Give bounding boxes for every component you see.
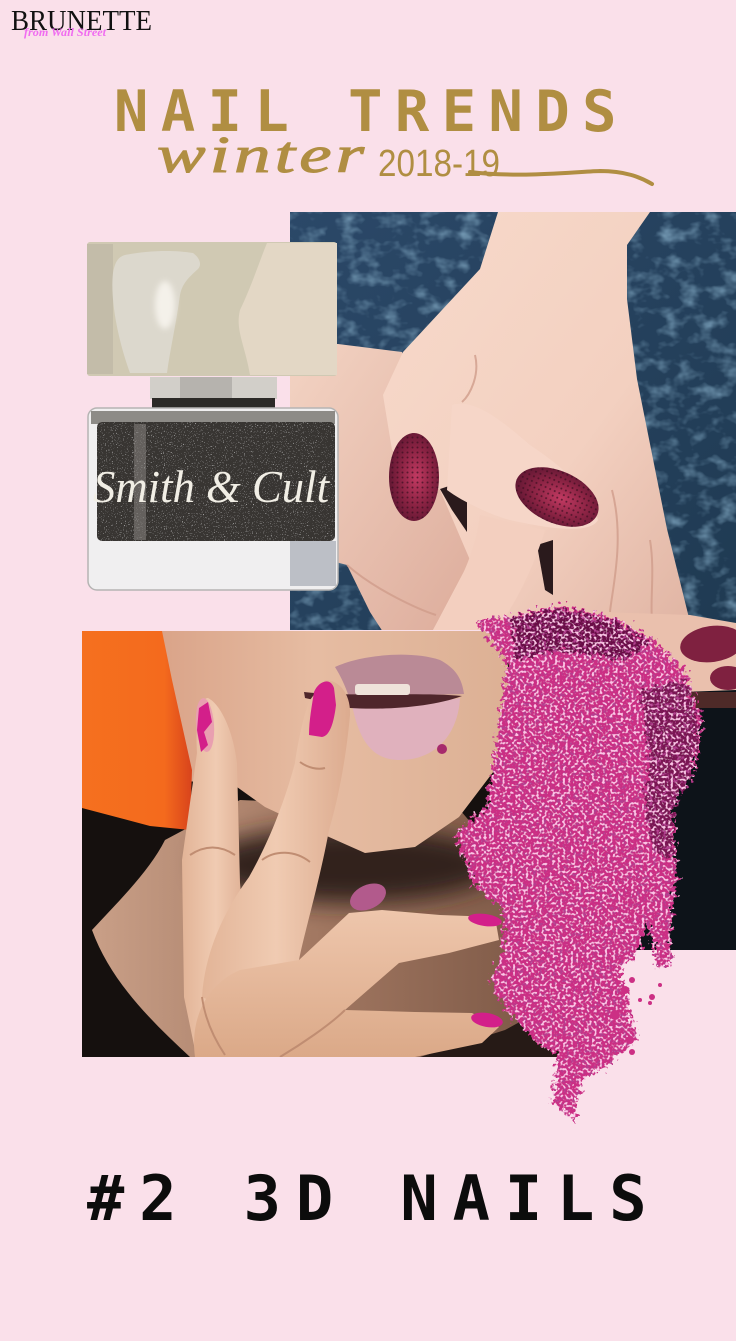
background hand (290, 344, 485, 632)
glass highlight (134, 424, 146, 540)
fur texture (290, 212, 736, 630)
hand with thumb (194, 910, 499, 1057)
logo tagline: from Wall Street (24, 25, 107, 39)
face (150, 631, 515, 853)
cap side band (87, 244, 113, 374)
nail: upper finger (389, 433, 439, 521)
title (114, 79, 652, 185)
heading: nail trends: NAIL TRENDS (114, 79, 629, 145)
maroon nails top right (678, 622, 736, 690)
footer heading: #2 3D NAILS (87, 1162, 662, 1235)
decorative swash underline (470, 171, 652, 184)
bottle cap (87, 242, 337, 376)
subheading: winter: winter (157, 126, 368, 184)
logo wordmark: BRUNETTE (11, 5, 152, 37)
bottle glass (88, 408, 338, 590)
cap right tone (239, 243, 337, 375)
leopard nail: pinky (196, 698, 214, 752)
dark glitter crest on top (510, 608, 650, 660)
subheading year: 2018-19 (378, 143, 500, 185)
bottle brand script: Smith & Cult (93, 461, 330, 512)
dark corner at bottom right (420, 1022, 559, 1057)
neck and chest (92, 800, 560, 1057)
dark glitter along right edge (640, 680, 700, 860)
orange hair (82, 631, 192, 830)
leopard nail: index (309, 681, 336, 737)
leopard nail: lower (471, 1012, 503, 1028)
right dark backdrop (620, 690, 736, 950)
glitter swatch (455, 605, 703, 1120)
cap glint (155, 281, 175, 329)
leopard nail: thumb (468, 914, 502, 926)
ring and index finger (202, 680, 350, 1020)
glitter polish (97, 422, 335, 541)
glitter main body (455, 605, 703, 1120)
lips (304, 655, 464, 760)
scattered glitter crumbs (610, 977, 662, 1055)
bottle neck (150, 377, 277, 408)
finger creases (190, 762, 345, 1057)
overlapping finger (447, 471, 598, 529)
photo: woman with leopard nails (82, 612, 736, 1057)
hand at top right (600, 612, 736, 692)
pinky finger (182, 698, 240, 1046)
nail polish bottle (87, 242, 338, 590)
logo (11, 5, 152, 39)
main hand (383, 212, 690, 630)
bottle glass shoulder (91, 411, 335, 424)
blue fur background (290, 212, 736, 630)
nail: side finger (515, 467, 599, 527)
finger shadows (440, 480, 553, 595)
shadow under chin (200, 827, 500, 903)
photo: hands on blue fur (290, 212, 736, 632)
bottle lower reflection (290, 541, 336, 586)
maroon shadow under hand (683, 692, 736, 708)
lower finger (464, 544, 540, 570)
finger creases (347, 355, 652, 620)
cap highlight (112, 251, 200, 373)
dark background (82, 658, 509, 1057)
leopard nail: ring (350, 884, 386, 910)
portrait photo base (82, 631, 560, 1057)
